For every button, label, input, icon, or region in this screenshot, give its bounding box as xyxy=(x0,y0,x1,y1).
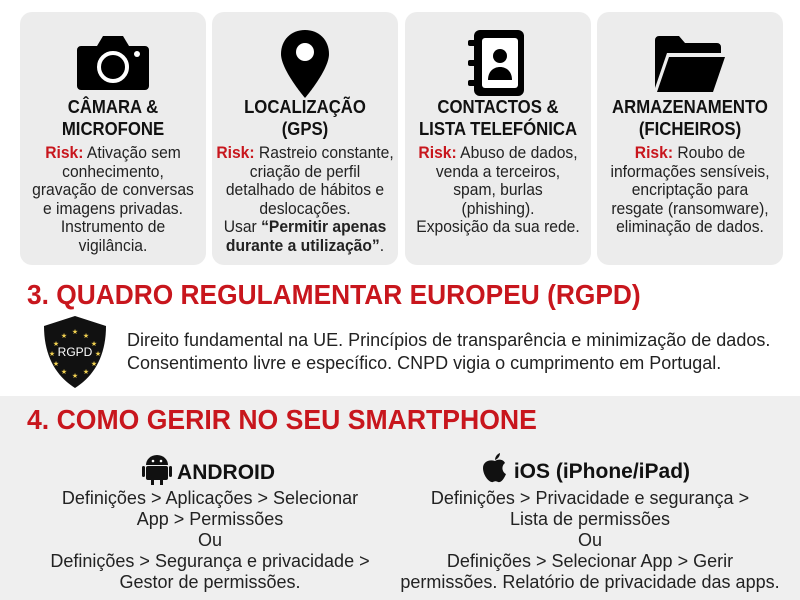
ios text xyxy=(400,488,780,592)
ios text: Ou xyxy=(578,530,602,550)
heading: MICROFONE xyxy=(62,119,164,139)
android label xyxy=(142,455,275,485)
heading: CÂMARA & xyxy=(68,97,158,117)
ios text: Lista de permissões xyxy=(510,509,670,529)
icon: RGPD shield: ★ xyxy=(61,368,67,376)
text: spam, burlas xyxy=(453,180,543,199)
android text xyxy=(50,488,370,592)
text: conhecimento, xyxy=(62,162,164,180)
text: criação de perfil xyxy=(250,162,360,180)
text xyxy=(610,143,770,236)
icon: RGPD shield: ★ xyxy=(72,328,78,336)
text: Usar “Permitir apenas xyxy=(224,217,386,236)
heading: ARMAZENAMENTO xyxy=(612,97,768,117)
icon: RGPD shield: ★ xyxy=(53,360,59,368)
icon: RGPD shield xyxy=(44,316,106,388)
icon: RGPD shield: ★ xyxy=(91,340,97,348)
text: Risk: Ativação sem xyxy=(45,143,181,162)
text: eliminação de dados. xyxy=(616,217,764,236)
icon: RGPD shield: ★ xyxy=(83,332,89,340)
text: encriptação para xyxy=(632,180,748,199)
ios text: Definições > Selecionar App > Gerir xyxy=(447,551,733,571)
text xyxy=(32,143,194,254)
text: Exposição da sua rede. xyxy=(416,217,580,236)
heading: section 3: 3. QUADRO REGULAMENTAR EUROPEU (RGPD) xyxy=(27,279,641,310)
heading: CONTACTOS & xyxy=(437,97,559,117)
ios label xyxy=(483,453,690,483)
icon: RGPD shield: ★ xyxy=(91,360,97,368)
icon: camera xyxy=(77,36,149,90)
heading: (GPS) xyxy=(282,119,328,139)
icon: pin xyxy=(281,30,329,98)
heading: LISTA TELEFÓNICA xyxy=(419,119,577,139)
android text: Definições > Aplicações > Selecionar xyxy=(62,488,358,508)
text: vigilância. xyxy=(79,236,147,254)
icon: folder xyxy=(655,36,725,92)
text: Risk: Abuso de dados, xyxy=(418,143,578,162)
text: (phishing). xyxy=(461,198,535,218)
heading xyxy=(62,96,164,139)
ios text: permissões. Relatório de privacidade das apps. xyxy=(400,572,780,592)
text: venda a terceiros, xyxy=(436,162,560,180)
card: location xyxy=(212,12,398,265)
text: RGPD xyxy=(127,330,770,373)
android text: App > Permissões xyxy=(137,509,283,529)
ios label: iOS (iPhone/iPad) xyxy=(514,460,690,483)
heading: LOCALIZAÇÃO xyxy=(244,97,366,117)
icon: RGPD shield: ★ xyxy=(72,372,78,380)
text: gravação de conversas xyxy=(32,180,194,199)
text: detalhado de hábitos e xyxy=(226,180,384,199)
text: deslocações. xyxy=(259,198,351,218)
icon: address book xyxy=(468,30,524,96)
heading xyxy=(244,96,366,139)
android text: Gestor de permissões. xyxy=(119,572,301,592)
ios text: Definições > Privacidade e segurança > xyxy=(431,488,749,508)
text xyxy=(216,143,394,254)
text: Instrumento de xyxy=(61,217,165,236)
icon: RGPD shield: ★ xyxy=(83,368,89,376)
icon: RGPD shield: ★ xyxy=(61,332,67,340)
text: RGPD: Direito fundamental na UE. Princípios de transparência e minimização de dados. xyxy=(127,330,770,350)
android label: ANDROID xyxy=(177,461,275,484)
heading xyxy=(419,97,577,139)
text: durante a utilização”. xyxy=(226,236,384,254)
card: camera xyxy=(20,12,206,265)
heading xyxy=(612,97,768,139)
panel: smartphone section xyxy=(0,396,800,600)
android text: Ou xyxy=(198,530,222,550)
card: contacts xyxy=(405,12,591,265)
text: e imagens privadas. xyxy=(43,198,183,218)
card: storage xyxy=(597,12,783,265)
heading: (FICHEIROS) xyxy=(639,119,741,139)
android text: Definições > Segurança e privacidade > xyxy=(50,551,370,571)
text: resgate (ransomware), xyxy=(611,198,769,218)
text: RGPD: Consentimento livre e específico. CNPD vigia o cumprimento em Portugal. xyxy=(127,353,721,373)
icon: RGPD shield: ★ xyxy=(53,340,59,348)
icon: RGPD shield: ★ xyxy=(49,350,55,358)
text: Risk: Roubo de xyxy=(635,143,745,162)
icon: RGPD shield: ★ xyxy=(95,350,101,358)
text: Risk: Rastreio constante, xyxy=(216,143,394,162)
text: informações sensíveis, xyxy=(610,162,770,180)
text xyxy=(416,143,580,236)
heading: section 4: 4. COMO GERIR NO SEU SMARTPHONE xyxy=(27,404,537,435)
icon: RGPD shield: RGPD xyxy=(58,345,93,359)
